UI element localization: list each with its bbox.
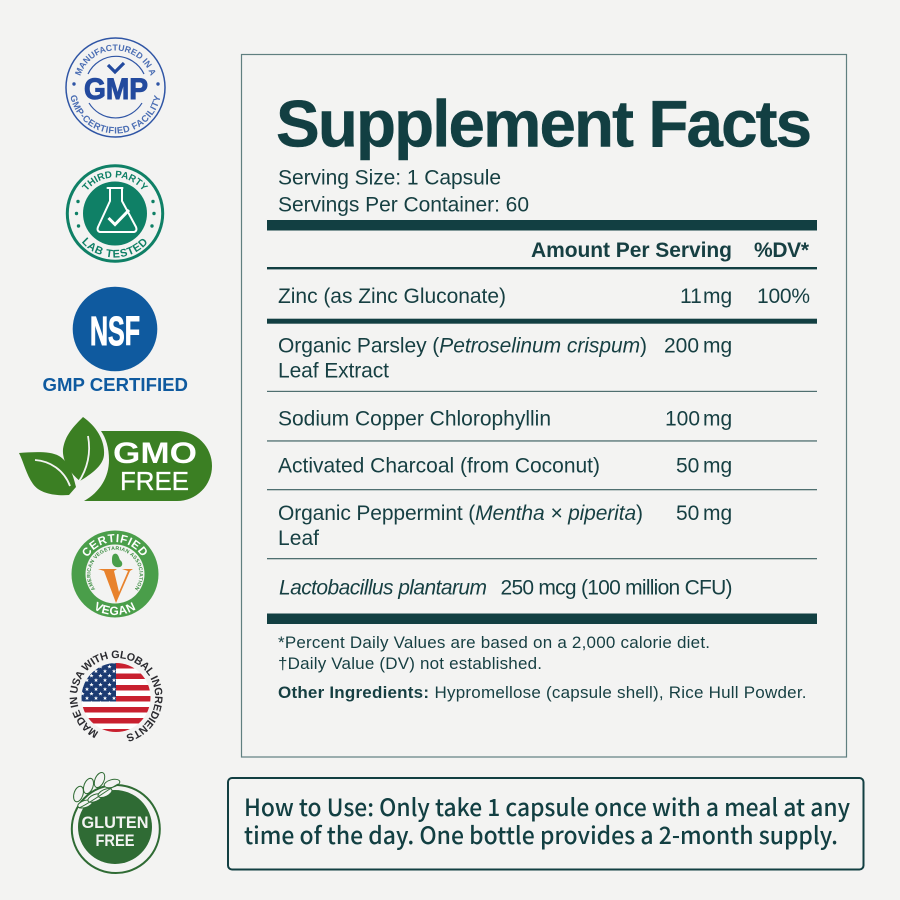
icon: third party lab tested badge: THIRD PARTY [82,170,148,190]
row: organic peppermint: Leaf [278,527,319,550]
other ingredients: Other Ingredients: [278,683,429,702]
icon: gluten free badge: GLUTEN [82,814,148,832]
row: zinc [278,285,810,308]
row: sodium copper chlorophyllin [278,408,732,431]
callout: how to use [228,778,864,870]
icon: certified vegan badge: VEGAN [96,602,136,616]
icon: certified vegan badge: AMERICAN VEGETARIAN ASSOCIATION [86,546,144,591]
row: activated charcoal: Activated Charcoal (from Coconut) [278,454,600,477]
footnotes: *Percent Daily Values are based on a 2,000 calorie diet. [278,633,710,652]
icon: GMP manufactured badge: GMP-CERTIFIED FACILITY [70,95,160,134]
icon: NSF GMP certified badge [42,287,188,395]
callout: how to use: How to Use: Only take 1 capsule once with a meal at any [244,788,850,823]
row: organic parsley: 200 [664,334,699,357]
icon: gluten free badge [72,771,160,873]
serving information: Servings Per Container: 60 [278,194,529,216]
icon: GMO free leaf badge: GMO [113,437,197,470]
row: organic peppermint [278,502,732,550]
row: sodium copper chlorophyllin: Sodium Copper Chlorophyllin [278,408,551,431]
icon: NSF GMP certified badge: NSF [90,308,140,354]
footnotes [278,633,710,673]
row: organic peppermint: mg [703,502,732,525]
row: lactobacillus plantarum: Lactobacillus plantarum [279,576,487,599]
table header: Amount Per Serving [531,239,732,262]
callout: how to use: time of the day. One bottle provides a 2-month supply. [244,816,838,851]
row: organic parsley: Leaf Extract [278,360,389,383]
row: organic peppermint: Organic Peppermint (Mentha × piperita) [278,502,643,525]
icon: GMP manufactured badge [65,37,166,138]
row: sodium copper chlorophyllin: mg [703,408,732,431]
row: organic parsley [278,334,732,383]
panel: supplement facts [242,54,846,757]
row: organic parsley: mg [703,334,732,357]
row: zinc: Zinc (as Zinc Gluconate) [278,285,506,308]
icon: certified vegan badge [72,530,158,618]
icon: NSF GMP certified badge: GMP CERTIFIED [42,375,188,395]
serving information: Serving Size: 1 Capsule [278,166,501,190]
row: activated charcoal: 50 [676,454,699,477]
row: organic parsley: Organic Parsley (Petroselinum crispum) [278,334,647,357]
row: sodium copper chlorophyllin: 100 [665,408,700,431]
icon: GMO free leaf badge: FREE [120,466,189,496]
row: zinc: 100% [757,285,810,308]
icon: made in USA flag badge: MADE IN USA WITH GLOBAL INGREDIENTS [70,650,163,742]
title: Supplement Facts [276,88,812,161]
row: zinc: mg [703,285,732,308]
row: lactobacillus plantarum: 250 mcg (100 million CFU) [500,576,732,599]
footnotes: †Daily Value (DV) not established. [278,654,542,673]
row: zinc: 11 [680,285,702,308]
other ingredients: Hypromellose (capsule shell), Rice Hull Powder. [434,683,806,702]
serving information [278,166,529,216]
icon: GMP manufactured badge: GMP [84,73,148,106]
table header: %DV* [754,239,810,262]
icon: GMP manufactured badge: MANUFACTURED IN A [74,44,156,76]
row: activated charcoal: mg [703,454,732,477]
icon: third party lab tested badge: LAB TESTED [82,237,146,258]
icon: GMO free leaf badge [19,417,212,501]
icon: gluten free badge: FREE [96,832,134,850]
icon: certified vegan badge: CERTIFIED [82,534,147,556]
row: organic peppermint: 50 [676,502,699,525]
icon: third party lab tested badge [66,164,164,263]
row: lactobacillus plantarum [279,576,732,599]
